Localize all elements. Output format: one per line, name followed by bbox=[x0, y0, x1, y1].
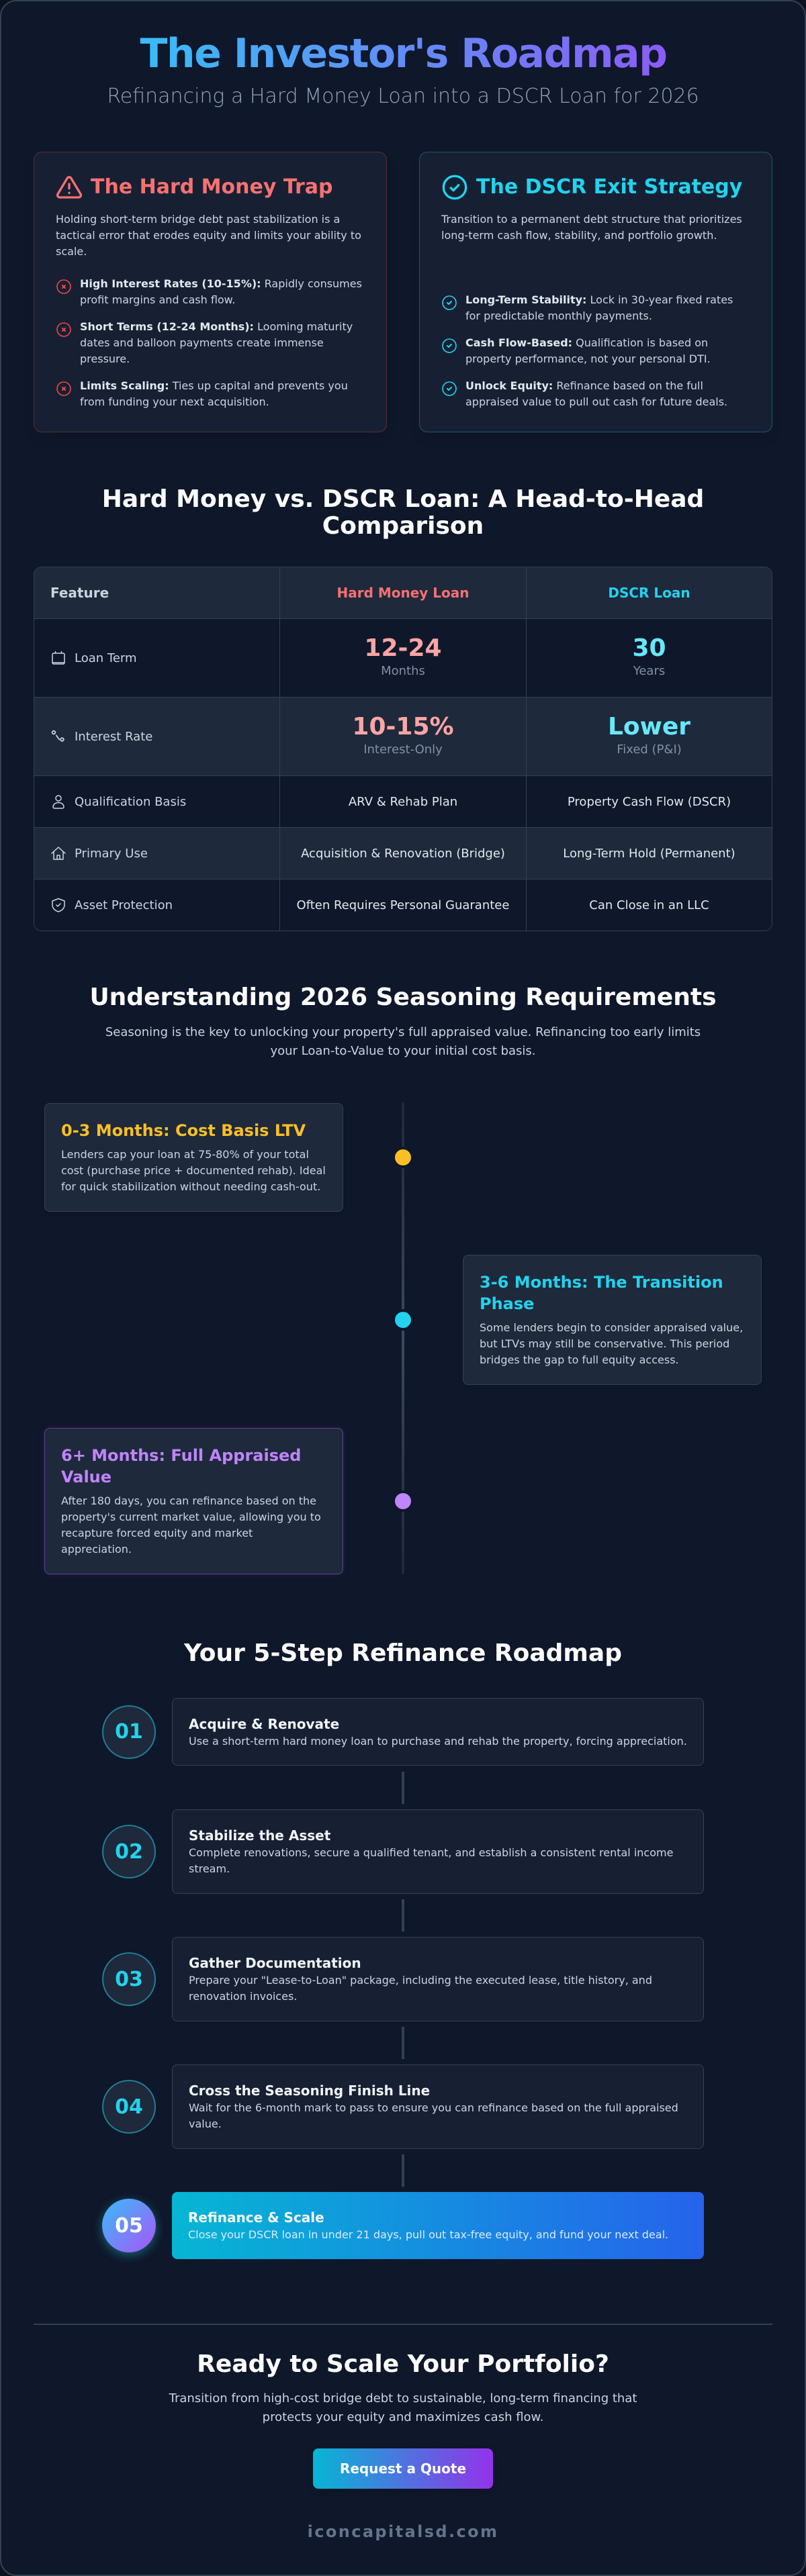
row: primary use: Long-Term Hold (Permanent) bbox=[563, 846, 735, 861]
row: qualification basis: ARV & Rehab Plan bbox=[349, 795, 457, 808]
card: 3-6 months: 3-6 Months: The Transition bbox=[480, 1273, 723, 1292]
table header row bbox=[34, 567, 772, 619]
step 5 bbox=[97, 2192, 704, 2261]
row: interest rate: Interest Rate bbox=[75, 729, 152, 744]
step number 01: 01 bbox=[115, 1720, 143, 1744]
card: 3-6 months bbox=[463, 1255, 762, 1385]
connector 3 bbox=[402, 2027, 404, 2059]
card: 3-6 months: Phase bbox=[480, 1294, 534, 1313]
footer text: Transition from high-cost bridge debt to sustainable, long-term financing that bbox=[169, 2391, 637, 2405]
step number 01 bbox=[102, 1705, 156, 1759]
card: 3-6 months: Some lenders begin to consider appraised value, bbox=[480, 1321, 743, 1334]
row: interest rate: Lower bbox=[608, 713, 690, 740]
list: dscr benefits bbox=[442, 293, 733, 408]
card: 6+ months: Value bbox=[61, 1468, 111, 1486]
card: 0-3 months: 0-3 Months: Cost Basis LTV bbox=[61, 1121, 306, 1140]
title: The Investor's Roadmap bbox=[140, 30, 667, 77]
step card: documentation: Prepare your "Lease-to-Loan" package, including the executed lease, title history, and bbox=[189, 1974, 652, 1987]
step number 05 bbox=[102, 2199, 156, 2252]
step number 04 bbox=[102, 2080, 156, 2134]
row: interest rate: Interest-Only bbox=[363, 743, 443, 756]
card: 3-6 months: but LTVs may still be conservative. This period bbox=[480, 1337, 729, 1350]
heading: seasoning: Understanding 2026 Seasoning Requirements bbox=[89, 984, 717, 1011]
list: trap drawbacks: profit margins and cash flow. bbox=[80, 293, 235, 306]
connector 1 bbox=[402, 1772, 404, 1804]
heading: hard money trap: The Hard Money Trap bbox=[91, 175, 333, 199]
card: 6+ months: recapture forced equity and market bbox=[61, 1527, 253, 1539]
row: loan term bbox=[34, 619, 772, 698]
text block: dscr intro bbox=[441, 213, 742, 242]
list: dscr benefits: Cash Flow-Based: Qualification is based on bbox=[465, 336, 708, 349]
card: 6+ months: 6+ Months: Full Appraised bbox=[61, 1446, 301, 1465]
row: loan term: Years bbox=[633, 663, 665, 678]
list: dscr benefits: appraised value to pull out cash for future deals. bbox=[465, 395, 727, 408]
step card: acquire bbox=[172, 1698, 704, 1766]
row: qualification basis: Qualification Basis bbox=[75, 795, 186, 808]
table header row: Hard Money Loan bbox=[337, 585, 469, 601]
comparison table bbox=[34, 567, 772, 931]
text block: trap intro: tactical error that erodes equity and limits your ability to bbox=[56, 229, 361, 242]
card: 0-3 months: Lenders cap your loan at 75-80% of your total bbox=[61, 1148, 309, 1161]
list: trap drawbacks: Short Terms (12-24 Months): Looming maturity bbox=[80, 320, 353, 333]
timeline axis bbox=[402, 1102, 404, 1574]
row: interest rate bbox=[34, 698, 772, 776]
list: dscr benefits: Long-Term Stability: Lock in 30-year fixed rates bbox=[465, 293, 733, 306]
card: 6+ months: property's current market value, allowing you to bbox=[61, 1511, 321, 1523]
text block: seasoning intro: Seasoning is the key to unlocking your property's full appraised value. Refinancing too early limits bbox=[105, 1025, 701, 1039]
heading: comparison bbox=[102, 485, 704, 540]
step card: refinance bbox=[172, 2192, 704, 2259]
list: trap drawbacks: Limits Scaling: Ties up capital and prevents you bbox=[80, 379, 348, 392]
card: 6+ months: appreciation. bbox=[61, 1543, 132, 1556]
step card: seasoning: Wait for the 6-month mark to pass to ensure you can refinance based on the full appraised bbox=[189, 2101, 678, 2114]
text block: trap intro: scale. bbox=[56, 245, 87, 258]
step card: refinance: Refinance & Scale bbox=[188, 2209, 324, 2226]
row: loan term: Loan Term bbox=[75, 651, 137, 665]
heading: comparison: Comparison bbox=[322, 512, 484, 540]
marker: 6+ months bbox=[392, 1490, 414, 1512]
step card: seasoning: Cross the Seasoning Finish Line bbox=[189, 2083, 430, 2099]
list: dscr benefits: Unlock Equity: Refinance based on the full bbox=[465, 379, 703, 392]
row: asset protection: Often Requires Personal Guarantee bbox=[297, 898, 509, 912]
step number 03: 03 bbox=[115, 1967, 143, 1991]
text block: dscr intro: long-term cash flow, stability, and portfolio growth. bbox=[441, 229, 717, 242]
panel: the hard money trap bbox=[34, 152, 387, 432]
step card: documentation bbox=[172, 1937, 704, 2021]
step 1 bbox=[102, 1698, 704, 1766]
row: loan term: Months bbox=[381, 663, 425, 678]
footer heading: Ready to Scale Your Portfolio? bbox=[197, 2350, 609, 2378]
step card: seasoning bbox=[172, 2064, 704, 2149]
list: trap drawbacks: dates and balloon payments create immense bbox=[80, 336, 324, 349]
step number 02: 02 bbox=[115, 1840, 143, 1864]
row: interest rate: 10-15% bbox=[352, 713, 454, 740]
text block: trap intro: Holding short-term bridge debt past stabilization is a bbox=[56, 213, 340, 226]
text block: seasoning intro: your Loan-to-Value to your initial cost basis. bbox=[270, 1044, 536, 1058]
step card: stabilize: Stabilize the Asset bbox=[189, 1827, 330, 1844]
step card: stabilize: stream. bbox=[189, 1862, 230, 1875]
row: loan term: 30 bbox=[632, 634, 666, 662]
row: primary use: Acquisition & Renovation (Bridge) bbox=[301, 846, 505, 861]
marker: 3-6 months bbox=[392, 1309, 414, 1331]
button: request a quote bbox=[313, 2448, 493, 2489]
step number 02 bbox=[102, 1825, 156, 1878]
step 4 bbox=[102, 2064, 704, 2149]
step number 04: 04 bbox=[115, 2095, 143, 2119]
website: iconcapitalsd.com bbox=[308, 2522, 498, 2541]
step number 03 bbox=[102, 1952, 156, 2006]
list: trap drawbacks: pressure. bbox=[80, 352, 130, 365]
row: interest rate: Fixed (P&I) bbox=[617, 743, 682, 756]
text block: dscr intro: Transition to a permanent debt structure that prioritizes bbox=[441, 213, 742, 226]
row: asset protection: Can Close in an LLC bbox=[589, 898, 709, 912]
text block: trap intro bbox=[56, 213, 361, 258]
list: dscr benefits: for predictable monthly payments. bbox=[465, 309, 652, 322]
button: request a quote: Request a Quote bbox=[340, 2461, 466, 2477]
row: loan term: 12-24 bbox=[364, 634, 442, 662]
card: 6+ months bbox=[44, 1428, 343, 1574]
footer text bbox=[169, 2391, 637, 2424]
table header row: Feature bbox=[50, 585, 109, 601]
row: primary use: Primary Use bbox=[75, 846, 148, 861]
row: qualification basis: Property Cash Flow (DSCR) bbox=[568, 795, 731, 808]
row: primary use bbox=[34, 828, 772, 879]
row: asset protection bbox=[34, 879, 772, 931]
list: trap drawbacks: High Interest Rates (10-15%): Rapidly consumes bbox=[80, 277, 362, 290]
list: dscr benefits: property performance, not your personal DTI. bbox=[465, 352, 711, 365]
row: asset protection: Asset Protection bbox=[75, 898, 173, 912]
step card: refinance: Close your DSCR loan in under 21 days, pull out tax-free equity, and fund your next deal. bbox=[188, 2228, 668, 2241]
heading: dscr exit strategy: The DSCR Exit Strategy bbox=[476, 175, 742, 199]
step card: seasoning: value. bbox=[189, 2117, 222, 2130]
card: 0-3 months bbox=[44, 1103, 343, 1212]
card: 6+ months: After 180 days, you can refinance based on the bbox=[61, 1494, 316, 1507]
step card: stabilize: Complete renovations, secure a qualified tenant, and establish a consistent rental income bbox=[189, 1846, 673, 1859]
step card: documentation: Gather Documentation bbox=[189, 1955, 361, 1971]
panel: the dscr exit strategy bbox=[419, 152, 772, 432]
step card: acquire: Acquire & Renovate bbox=[189, 1716, 339, 1732]
card: 3-6 months: bridges the gap to full equity access. bbox=[480, 1353, 679, 1366]
list: trap drawbacks: from funding your next acquisition. bbox=[80, 395, 269, 408]
row: qualification basis bbox=[34, 776, 772, 828]
heading: roadmap: Your 5-Step Refinance Roadmap bbox=[184, 1639, 622, 1667]
step number 05: 05 bbox=[115, 2214, 143, 2237]
footer text: protects your equity and maximizes cash flow. bbox=[263, 2410, 543, 2424]
step card: documentation: renovation invoices. bbox=[189, 1990, 297, 2003]
connector 2 bbox=[402, 1899, 404, 1931]
step card: acquire: Use a short-term hard money loan to purchase and rehab the property, forcing appreciation. bbox=[189, 1735, 687, 1748]
table header row: DSCR Loan bbox=[608, 585, 690, 601]
text block: seasoning intro bbox=[105, 1025, 701, 1058]
card: 0-3 months: for quick stabilization without needing cash-out. bbox=[61, 1180, 320, 1193]
list: trap drawbacks bbox=[56, 277, 362, 408]
step 2 bbox=[102, 1809, 704, 1894]
heading: comparison: Hard Money vs. DSCR Loan: A Head-to-Head bbox=[102, 485, 704, 513]
card: 0-3 months: cost (purchase price + documented rehab). Ideal bbox=[61, 1164, 326, 1177]
subtitle: Refinancing a Hard Money Loan into a DSCR Loan for 2026 bbox=[107, 85, 699, 108]
step 3 bbox=[102, 1937, 704, 2021]
connector 4 bbox=[402, 2154, 404, 2187]
timeline bbox=[44, 1102, 762, 1575]
step card: stabilize bbox=[172, 1809, 704, 1894]
marker: 0-3 months bbox=[392, 1147, 414, 1168]
